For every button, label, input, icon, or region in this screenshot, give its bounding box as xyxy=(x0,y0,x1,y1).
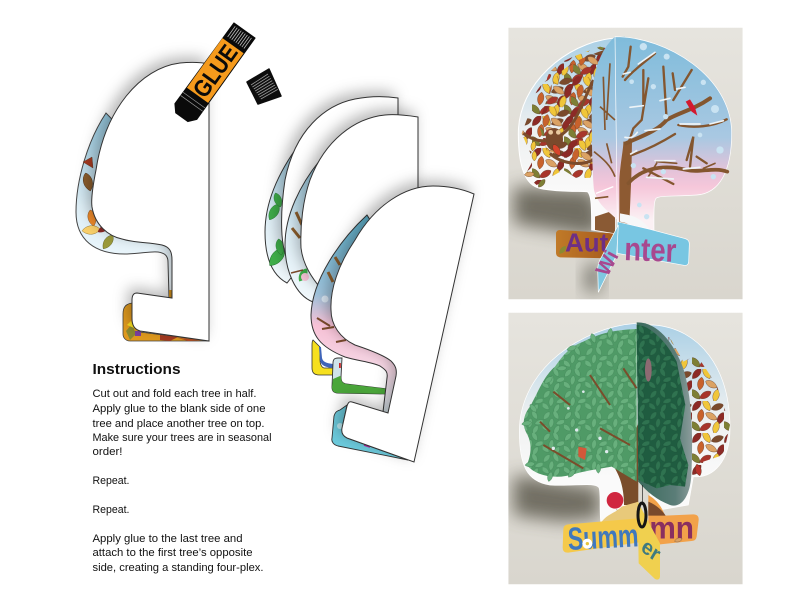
dark folded front panel xyxy=(637,322,692,506)
winter right tab: nter xyxy=(624,230,677,269)
cast shadow xyxy=(513,187,603,237)
back tree printed strip xyxy=(265,143,305,283)
instruction paragraphs: attach to the first tree’s opposite xyxy=(92,547,252,559)
bare branches xyxy=(619,47,727,223)
canopy edge leaves xyxy=(521,328,613,482)
summer right tab: er xyxy=(637,534,664,566)
panel: stacked trees xyxy=(265,97,474,462)
tree 1 blank folded side xyxy=(92,62,209,341)
snow on branches xyxy=(623,52,723,179)
snowflakes xyxy=(629,43,724,219)
front tree blank side xyxy=(331,186,474,462)
canopy branches xyxy=(540,368,637,468)
instruction paragraphs: Make sure your trees are in seasonal xyxy=(92,432,272,444)
cardinal xyxy=(686,99,697,116)
leaf canopy xyxy=(524,329,637,482)
photo: winter and autumn sides xyxy=(508,28,743,299)
blue winter tab xyxy=(332,405,408,460)
middle tree blank side xyxy=(301,115,418,290)
autumn back half xyxy=(650,325,730,512)
instruction paragraphs xyxy=(92,388,272,574)
winter tree right half xyxy=(615,37,732,233)
icon: glue stick xyxy=(171,22,256,126)
autumn right tab: mn xyxy=(649,509,694,545)
icon: glue stick: GLUE xyxy=(188,40,244,103)
green summer tab xyxy=(332,358,388,394)
snowy hill xyxy=(620,213,636,224)
summer right tab xyxy=(638,502,661,580)
middle tree printed strip xyxy=(285,160,345,302)
autumn right tab xyxy=(648,495,699,546)
instruction paragraphs: Repeat. xyxy=(92,504,130,516)
summer left tab: Summ xyxy=(567,517,639,557)
instruction paragraphs: Apply glue to the last tree and xyxy=(92,533,242,545)
canopy gaps xyxy=(552,390,608,453)
summer left half xyxy=(519,323,638,522)
tree 1 orange tab xyxy=(123,303,209,341)
winter tree left fold xyxy=(592,37,625,220)
instruction paragraphs: Repeat. xyxy=(92,475,130,487)
autumn tree half xyxy=(518,38,624,233)
balloon xyxy=(606,492,624,510)
cast shadow xyxy=(513,475,600,522)
autumn tab: Aut xyxy=(565,228,609,258)
tan hill behind tab xyxy=(602,502,638,522)
photo: summer and autumn sides xyxy=(508,313,743,584)
winter left tab xyxy=(594,224,619,292)
front tree printed strip xyxy=(311,215,420,413)
yellow spring tab xyxy=(312,340,333,375)
instruction paragraphs: order! xyxy=(92,446,122,458)
instruction paragraphs: Apply glue to the blank side of one xyxy=(92,403,266,415)
winter left tab: Wi xyxy=(591,247,624,280)
instructions text block xyxy=(92,361,272,574)
summer left tab xyxy=(562,518,638,553)
trunk xyxy=(614,423,638,505)
infographic canvas xyxy=(76,22,742,584)
panel: first tree with glue stick xyxy=(76,22,281,341)
instruction paragraphs: tree and place another tree on top. xyxy=(92,418,264,430)
instruction paragraphs: side, creating a standing four-plex. xyxy=(92,562,264,574)
heading: Instructions xyxy=(92,361,180,378)
tree 1 printed side strip xyxy=(76,113,190,298)
icon: glue cap xyxy=(247,69,281,104)
back tree blank side xyxy=(282,97,398,280)
tire swing xyxy=(638,485,646,527)
instruction paragraphs: Cut out and fold each tree in half. xyxy=(92,388,256,400)
